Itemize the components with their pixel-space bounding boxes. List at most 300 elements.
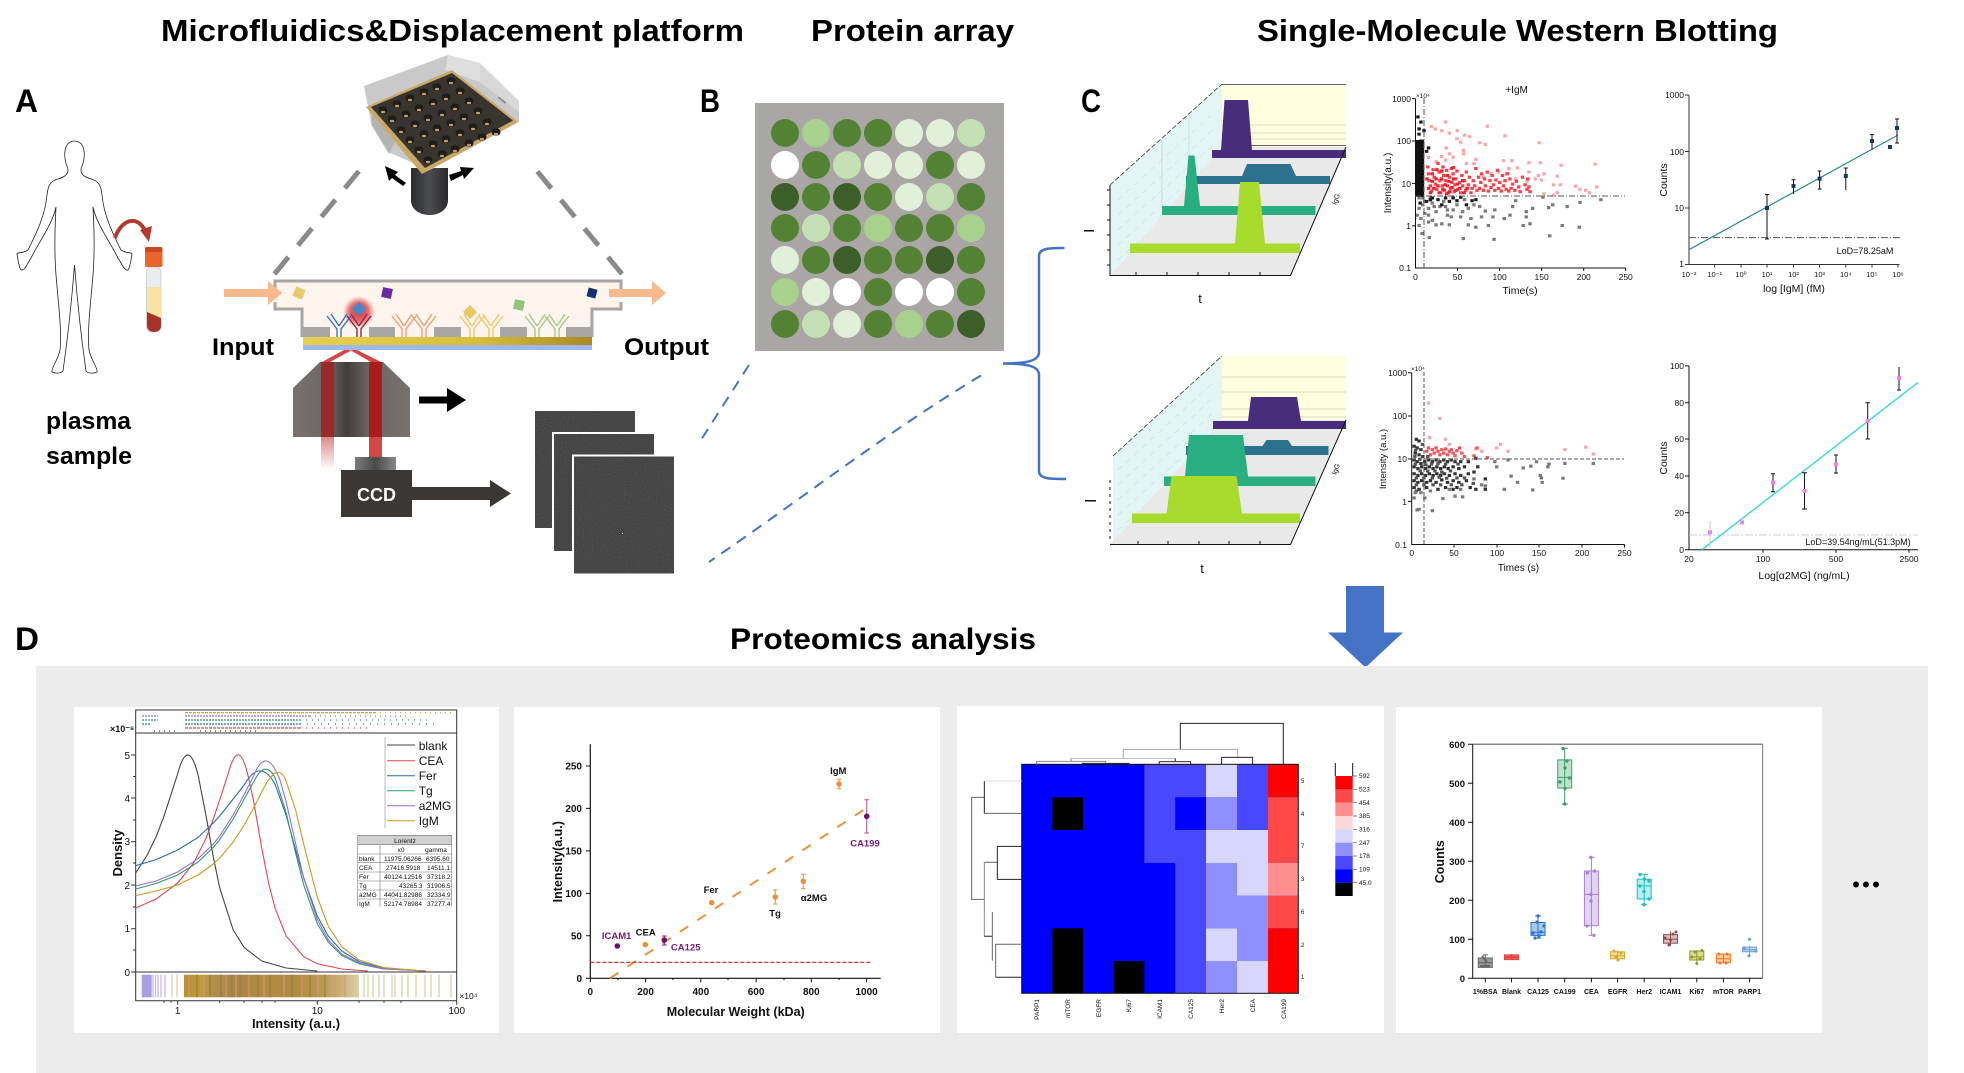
axes bbox=[1689, 95, 1900, 264]
column labels: PARP1 bbox=[1034, 999, 1041, 1020]
points PARP1 bbox=[1742, 938, 1758, 957]
chart: IgM calibration: 10¹ bbox=[1762, 270, 1773, 279]
panel: clustered heatmap: 3 bbox=[1301, 877, 1305, 883]
ellipsis: more panels bbox=[1853, 882, 1879, 888]
fit line bbox=[610, 810, 863, 978]
multiplier label: ×10⁴ bbox=[1411, 366, 1425, 373]
purple trace bbox=[1212, 100, 1346, 158]
title: Protein array: Protein array bbox=[811, 13, 1015, 48]
arrow: output flow bbox=[609, 281, 666, 305]
tick labels: 200 bbox=[637, 987, 654, 998]
chart: IgM calibration: 10⁻¹ bbox=[1707, 270, 1723, 279]
box Her2 bbox=[1637, 874, 1651, 905]
icon: CCD camera bbox=[341, 457, 412, 517]
legend: blank bbox=[419, 739, 448, 753]
color scale: 523 bbox=[1359, 786, 1370, 794]
panel: clustered heatmap: 7 bbox=[1301, 844, 1305, 850]
panel label D: D bbox=[15, 621, 39, 657]
panel: intensity vs molecular weight: Intensity(a.u.) bbox=[551, 821, 565, 902]
channel wall bbox=[275, 281, 621, 337]
point labels: ICAM1 bbox=[602, 931, 632, 942]
tick labels: 200 bbox=[1577, 272, 1591, 282]
color scale: 247 bbox=[1359, 840, 1370, 847]
axis label rotated: IgG bbox=[1331, 463, 1342, 476]
parameter table: 6395.60 bbox=[426, 856, 450, 863]
parameter table: Lorentz bbox=[394, 838, 416, 845]
chart: scatter alpha2MG: 1 bbox=[1402, 497, 1407, 507]
arrow: black to the right bbox=[419, 388, 466, 412]
floor bbox=[1110, 420, 1346, 544]
error bars bbox=[1765, 119, 1899, 239]
multiplier label: ×10⁴ bbox=[1416, 93, 1430, 100]
chart: 3D waterfall top bbox=[1084, 84, 1346, 306]
color scale: 109 bbox=[1359, 866, 1370, 874]
tick labels bbox=[565, 762, 878, 998]
panel: protein array bbox=[755, 103, 1004, 351]
error bars bbox=[662, 936, 667, 945]
legend: Fer bbox=[419, 769, 437, 783]
illustration: 3D microfluidic chip with objective bbox=[364, 55, 519, 215]
axis label t: t bbox=[1200, 561, 1204, 576]
panel: box plot of counts: 300 bbox=[1449, 857, 1465, 868]
icon: human body outline bbox=[17, 141, 132, 373]
box EGFR bbox=[1611, 950, 1625, 960]
data points bbox=[1708, 376, 1901, 534]
dashed zoom line left bbox=[274, 171, 359, 274]
tick labels: 0.1 bbox=[1399, 263, 1411, 273]
axes bbox=[590, 744, 881, 978]
icon: black motion arrow right bbox=[449, 167, 474, 181]
axes bbox=[1416, 99, 1626, 268]
chart: alpha2MG calibration: 40 bbox=[1675, 471, 1684, 481]
box 1%BSA bbox=[1478, 955, 1492, 967]
panel: density distribution chart: 2 bbox=[124, 881, 130, 892]
tick labels: 100 bbox=[1397, 136, 1411, 146]
axis label rotated: IgG bbox=[1331, 193, 1342, 206]
panel: density distribution chart: Density bbox=[110, 829, 125, 876]
tick labels: 400 bbox=[692, 987, 710, 998]
icon: red curved arrow to tube bbox=[115, 221, 152, 242]
chart: scatter alpha2MG: 150 bbox=[1532, 548, 1546, 558]
points CEA bbox=[1585, 856, 1596, 937]
panel: box plot of counts: CEA bbox=[1584, 989, 1599, 996]
legend: a2MG bbox=[419, 799, 451, 813]
point labels: IgM bbox=[830, 766, 847, 777]
title: Microfluidics & Displacement platform: Microfluidics&Displacement platform bbox=[161, 13, 744, 48]
parameter table: 37318.2 bbox=[427, 874, 451, 881]
transparent housing bbox=[364, 55, 519, 170]
panel: density distribution chart: 1 bbox=[175, 1006, 181, 1017]
panel: box plot of counts: CA125 bbox=[1527, 989, 1549, 996]
teal trace bbox=[1186, 440, 1328, 455]
panel: density distribution chart: 3 bbox=[124, 837, 130, 848]
axes bbox=[1110, 420, 1346, 544]
point labels: α2MG bbox=[801, 893, 827, 904]
tick labels: 10 bbox=[1402, 179, 1411, 189]
points Her2 bbox=[1638, 873, 1651, 906]
panel: density distribution chart: 10 bbox=[312, 1006, 323, 1017]
gold board bbox=[366, 70, 518, 174]
chart: IgM calibration: 1 bbox=[1679, 259, 1684, 269]
lime trace bbox=[1130, 182, 1300, 253]
points Ki67 bbox=[1690, 949, 1704, 965]
point labels: Fer bbox=[704, 885, 719, 896]
axis titles: log [IgM] (fM) bbox=[1763, 283, 1825, 295]
panel: clustered heatmap bbox=[957, 706, 1384, 1033]
panel: clustered heatmap: CA125 bbox=[1188, 999, 1195, 1019]
tick labels: 200 bbox=[565, 804, 582, 815]
point labels bbox=[602, 766, 880, 954]
chart: alpha2MG calibration: 0 bbox=[1679, 545, 1684, 555]
chart: IgM calibration: 10⁰ bbox=[1735, 270, 1747, 279]
panel: intensity vs molecular weight bbox=[514, 707, 940, 1033]
tick labels: 1 bbox=[1406, 221, 1411, 231]
panel: box plot of counts: Blank bbox=[1502, 989, 1521, 996]
chart: alpha2MG calibration bbox=[1658, 361, 1919, 582]
arrow: CCD to images bbox=[412, 480, 511, 507]
axis label dash bbox=[1085, 500, 1096, 502]
axes bbox=[1110, 147, 1346, 276]
box Ki67 bbox=[1690, 950, 1704, 964]
parameter table: 27416.5918 bbox=[386, 865, 421, 872]
parameter table: blank bbox=[359, 856, 375, 863]
tick labels: 1000 bbox=[1665, 90, 1684, 100]
floor bbox=[1110, 147, 1346, 276]
chart: alpha2MG calibration: 20 bbox=[1675, 508, 1684, 518]
chart: IgM calibration: 10⁶ bbox=[1892, 270, 1904, 279]
point labels: CEA bbox=[636, 928, 656, 938]
data points bbox=[1765, 126, 1899, 210]
heading: Proteomics analysis: Proteomics analysis bbox=[730, 623, 1036, 656]
chart: scatter alpha2MG: 100 bbox=[1490, 548, 1504, 558]
chart: scatter alpha2MG: 50 bbox=[1449, 548, 1459, 558]
points bbox=[1412, 403, 1595, 511]
analyte particles bbox=[352, 302, 366, 316]
arrow: input flow bbox=[224, 281, 282, 305]
panel: box plot of counts: Her2 bbox=[1636, 989, 1652, 996]
panel: density distribution chart bbox=[74, 707, 499, 1033]
chart: scatter alpha2MG: Intensity (a.u.) bbox=[1378, 429, 1389, 489]
top rug plot bbox=[142, 713, 452, 731]
points bbox=[1415, 117, 1603, 239]
parameter table: 31906.5 bbox=[427, 883, 451, 890]
side wall bbox=[1110, 84, 1222, 275]
points mTOR bbox=[1718, 952, 1728, 964]
panel: clustered heatmap: CEA bbox=[1250, 998, 1257, 1012]
fit line bbox=[1689, 135, 1898, 250]
chart: 3D waterfall bottom bbox=[1085, 356, 1346, 576]
chart: alpha2MG calibration: 80 bbox=[1675, 398, 1684, 408]
chart: IgM calibration: 10⁴ bbox=[1840, 270, 1852, 279]
panel: box plot of counts bbox=[1396, 707, 1822, 1033]
axis titles: Log[α2MG] (ng/mL) bbox=[1758, 570, 1850, 582]
box Blank bbox=[1504, 954, 1518, 960]
threshold line bbox=[590, 961, 872, 963]
parameter table: gamma bbox=[425, 847, 447, 854]
axis labels: ×10⁻⁶ bbox=[110, 724, 134, 734]
panel: clustered heatmap: 6 bbox=[1301, 910, 1305, 916]
wells bbox=[382, 81, 497, 160]
box mTOR bbox=[1716, 954, 1730, 964]
parameter table: x0 bbox=[398, 847, 405, 854]
chart: IgM calibration bbox=[1658, 90, 1904, 295]
parameter table bbox=[358, 835, 452, 908]
image stack bbox=[534, 410, 675, 574]
legend: CEA bbox=[419, 754, 443, 768]
text: plasma sample: sample bbox=[46, 443, 132, 470]
row labels: 5 bbox=[1301, 779, 1305, 785]
side wall bbox=[1113, 356, 1222, 543]
parameter table: 11975.06266 bbox=[384, 856, 422, 863]
chart: alpha2MG calibration: 2500 bbox=[1900, 554, 1919, 564]
axes bbox=[1473, 743, 1763, 745]
panel: box plot of counts: Ki67 bbox=[1689, 989, 1704, 996]
box CA199 bbox=[1558, 748, 1572, 804]
panel: density distribution chart: ×10⁴ bbox=[459, 991, 478, 1001]
axis titles: Times (s) bbox=[1498, 563, 1539, 574]
panel: clustered heatmap: 1 bbox=[1301, 975, 1305, 981]
title: Single-Molecule Western Blotting: Single-Molecule Western Blotting bbox=[1257, 13, 1778, 48]
parameter table: 32334.9 bbox=[427, 892, 451, 899]
icon: CCD camera: CCD bbox=[357, 485, 396, 505]
panel: density distribution chart: 4 bbox=[124, 794, 130, 805]
panel: density distribution chart: Intensity (a.u.) bbox=[252, 1016, 340, 1031]
diagram: flow cell with antibodies bbox=[275, 281, 621, 350]
tick labels: 50 bbox=[1453, 272, 1462, 282]
chart: scatter alpha2MG: 0 bbox=[1409, 548, 1414, 558]
points CA199 bbox=[1558, 747, 1571, 806]
fluorescence glow bbox=[343, 296, 375, 328]
chart: scatter alpha2MG: 0.1 bbox=[1395, 540, 1407, 550]
back wall bbox=[1222, 356, 1346, 421]
tick labels: 0 bbox=[588, 987, 594, 998]
panel: density distribution chart: 0 bbox=[124, 968, 130, 979]
text: plasma sample bbox=[46, 408, 132, 470]
point labels: CA199 bbox=[850, 838, 880, 850]
panel: clustered heatmap: 4 bbox=[1301, 812, 1305, 818]
limit of detection line bbox=[1689, 237, 1900, 239]
chart: scatter alpha2MG bbox=[1378, 366, 1632, 574]
parameter table: 52174.78984 bbox=[384, 901, 422, 908]
chart: alpha2MG calibration: Counts bbox=[1658, 441, 1670, 475]
heatmap cells bbox=[1022, 764, 1298, 993]
chart: alpha2MG calibration: 100 bbox=[1756, 554, 1770, 564]
threshold lines bbox=[1415, 98, 1625, 268]
tick labels: 150 bbox=[565, 846, 582, 858]
legend: IgM bbox=[419, 814, 439, 828]
panel: box plot of counts: 500 bbox=[1449, 779, 1465, 790]
objective cylinder bbox=[411, 168, 448, 215]
axes bbox=[1689, 366, 1918, 550]
dashed zoom line right bbox=[537, 171, 622, 274]
tick labels: 800 bbox=[803, 987, 820, 998]
channel interior bbox=[275, 281, 621, 337]
glass layer bbox=[303, 345, 592, 350]
parameter table: Tg bbox=[359, 883, 367, 890]
antibodies bbox=[327, 314, 569, 337]
chart title: +IgM bbox=[1505, 85, 1528, 96]
panel: clustered heatmap: Her2 bbox=[1219, 999, 1226, 1013]
threshold lines bbox=[1412, 372, 1624, 544]
chart: alpha2MG calibration: 500 bbox=[1829, 554, 1843, 564]
green trace bbox=[1162, 156, 1316, 215]
fit line bbox=[1702, 382, 1918, 550]
tick labels: 50 bbox=[571, 932, 582, 942]
tick labels: 0 bbox=[576, 974, 582, 985]
chart: IgM calibration: 100 bbox=[1670, 147, 1684, 157]
chart: scatter alpha2MG: 100 bbox=[1393, 411, 1407, 421]
dashed projection line two bbox=[709, 376, 981, 562]
gold layer bbox=[303, 337, 592, 345]
frame and axes bbox=[136, 710, 457, 1001]
chart: IgM calibration: Counts bbox=[1658, 163, 1670, 197]
panel: density distribution chart: 1 bbox=[124, 924, 130, 935]
chart: alpha2MG calibration: 60 bbox=[1675, 434, 1684, 444]
panel: box plot of counts: 200 bbox=[1449, 896, 1465, 907]
arrow: large blue down bbox=[1328, 586, 1403, 668]
parameter table: 44041.82986 bbox=[384, 892, 422, 899]
box ICAM1 bbox=[1664, 932, 1678, 946]
chart: scatter alpha2MG: 10 bbox=[1398, 454, 1407, 464]
panel: box plot of counts: 1%BSA bbox=[1473, 989, 1498, 996]
grey blocks bbox=[302, 327, 592, 337]
error bars bbox=[1709, 521, 1711, 548]
box CEA bbox=[1584, 857, 1598, 935]
color scale: 178 bbox=[1359, 853, 1370, 860]
label: Output: Output bbox=[624, 334, 709, 361]
tick labels: 600 bbox=[1449, 740, 1465, 751]
chart: scatter +IgM bbox=[1383, 85, 1633, 297]
tick labels: 1000 bbox=[1392, 94, 1411, 104]
panel: clustered heatmap: EGFR bbox=[1096, 999, 1103, 1017]
annotation LoD: LoD=78.25aM bbox=[1837, 246, 1893, 256]
parameter table: 43265.3 bbox=[399, 883, 423, 890]
chart: scatter +IgM: Intensity(a.u.) bbox=[1383, 153, 1394, 213]
tick labels: 1000 bbox=[855, 987, 878, 998]
parameter table: CEA bbox=[359, 865, 373, 872]
purple trace bbox=[1213, 397, 1346, 429]
chart: IgM calibration: 10⁻² bbox=[1682, 270, 1697, 279]
chart: IgM calibration: 10² bbox=[1788, 270, 1799, 279]
green trace bbox=[1164, 435, 1316, 486]
density curves bbox=[136, 755, 426, 971]
icon: blood collection tube bbox=[145, 247, 162, 332]
color scale: 316 bbox=[1359, 826, 1370, 834]
annotation LoD: LoD=39.54ng/mL(51.3pM) bbox=[1805, 537, 1911, 547]
parameter table: 14511.1 bbox=[427, 865, 450, 872]
top dendrogram bbox=[1037, 723, 1283, 764]
color scale: 454 bbox=[1359, 800, 1370, 807]
box PARP1 bbox=[1743, 946, 1757, 956]
panel: clustered heatmap: mTOR bbox=[1065, 999, 1072, 1018]
panel: box plot of counts: CA199 bbox=[1554, 989, 1576, 996]
points EGFR bbox=[1612, 950, 1622, 962]
dark plate bbox=[371, 73, 513, 168]
tick labels: 150 bbox=[1535, 272, 1549, 282]
data points bbox=[642, 781, 842, 948]
color scale: 45.0 bbox=[1359, 880, 1372, 887]
tick labels: 0 bbox=[1413, 272, 1418, 282]
axis label t: t bbox=[1198, 291, 1202, 306]
panel: density distribution chart: 5 bbox=[124, 751, 130, 762]
label: Input: Input bbox=[212, 334, 274, 361]
brace connecting array to results bbox=[1003, 248, 1066, 479]
chart: IgM calibration: 10⁵ bbox=[1866, 270, 1878, 279]
axes bbox=[1412, 373, 1624, 544]
tick labels: 600 bbox=[748, 987, 765, 998]
chart: scatter alpha2MG: 250 bbox=[1617, 548, 1632, 558]
back wall bbox=[1222, 84, 1346, 149]
points CA125 bbox=[1531, 914, 1546, 940]
panel: clustered heatmap: CA199 bbox=[1281, 999, 1288, 1019]
color scale: 385 bbox=[1359, 813, 1370, 820]
bottom rug plot bbox=[142, 975, 451, 997]
chart: IgM calibration: 10³ bbox=[1814, 270, 1826, 279]
tick labels: 1000 bbox=[1388, 368, 1407, 378]
panel: box plot of counts: ICAM1 bbox=[1660, 989, 1681, 996]
illustration: objective lens with laser beams bbox=[293, 350, 410, 470]
axis titles: Time(s) bbox=[1502, 285, 1538, 297]
point labels: CA125 bbox=[671, 942, 701, 954]
panel: clustered heatmap: ICAM1 bbox=[1157, 999, 1164, 1019]
tick labels: 250 bbox=[565, 762, 582, 772]
legend bbox=[385, 737, 451, 828]
chart: alpha2MG calibration: 20 bbox=[1684, 554, 1694, 564]
dashed projection line one bbox=[699, 365, 749, 443]
panel: density distribution chart: 100 bbox=[448, 1006, 465, 1017]
legend: Tg bbox=[419, 784, 433, 798]
axis label dash bbox=[1084, 230, 1094, 232]
panel label C: C bbox=[1081, 83, 1101, 119]
panel label A: A bbox=[15, 83, 38, 119]
tick labels bbox=[1392, 94, 1633, 282]
color scale: 592 bbox=[1359, 773, 1370, 780]
panel label B: B bbox=[700, 83, 720, 119]
axis titles: Molecular Weight (kDa) bbox=[667, 1005, 805, 1019]
panel: box plot of counts: PARP1 bbox=[1738, 989, 1761, 996]
left dendrogram bbox=[972, 781, 1022, 977]
parameter table: a2MG bbox=[359, 892, 377, 899]
parameter table: 37277.4 bbox=[427, 901, 451, 908]
parameter table: 40124.12516 bbox=[384, 874, 422, 881]
panel: clustered heatmap: Ki67 bbox=[1126, 999, 1133, 1012]
tick labels: 100 bbox=[1493, 272, 1507, 282]
box CA125 bbox=[1531, 916, 1545, 938]
panel: box plot of counts: EGFR bbox=[1608, 989, 1627, 996]
panel: box plot of counts: 400 bbox=[1449, 818, 1465, 829]
tick labels: 100 bbox=[1670, 361, 1684, 371]
icon: black motion arrow left bbox=[385, 166, 406, 186]
color scale bbox=[1335, 763, 1372, 896]
chart: scatter alpha2MG: 200 bbox=[1575, 548, 1589, 558]
teal trace bbox=[1186, 164, 1330, 184]
axis title: Counts bbox=[1433, 840, 1447, 883]
lime trace bbox=[1132, 476, 1300, 523]
panel: proteomics background bbox=[36, 666, 1928, 1073]
panel: box plot of counts: mTOR bbox=[1713, 989, 1734, 996]
chart: IgM calibration: 10 bbox=[1675, 203, 1684, 213]
tick labels: 250 bbox=[1619, 272, 1633, 282]
tick labels: 100 bbox=[565, 889, 582, 900]
text: plasma sample: plasma bbox=[46, 408, 132, 435]
panel: box plot of counts: 100 bbox=[1449, 935, 1465, 946]
panel: clustered heatmap: 2 bbox=[1301, 943, 1305, 949]
points ICAM1 bbox=[1664, 930, 1678, 946]
parameter table: Fer bbox=[359, 874, 370, 881]
limit of detection line bbox=[1689, 534, 1918, 536]
parameter table: IgM bbox=[359, 901, 370, 908]
point labels: Tg bbox=[769, 908, 781, 920]
